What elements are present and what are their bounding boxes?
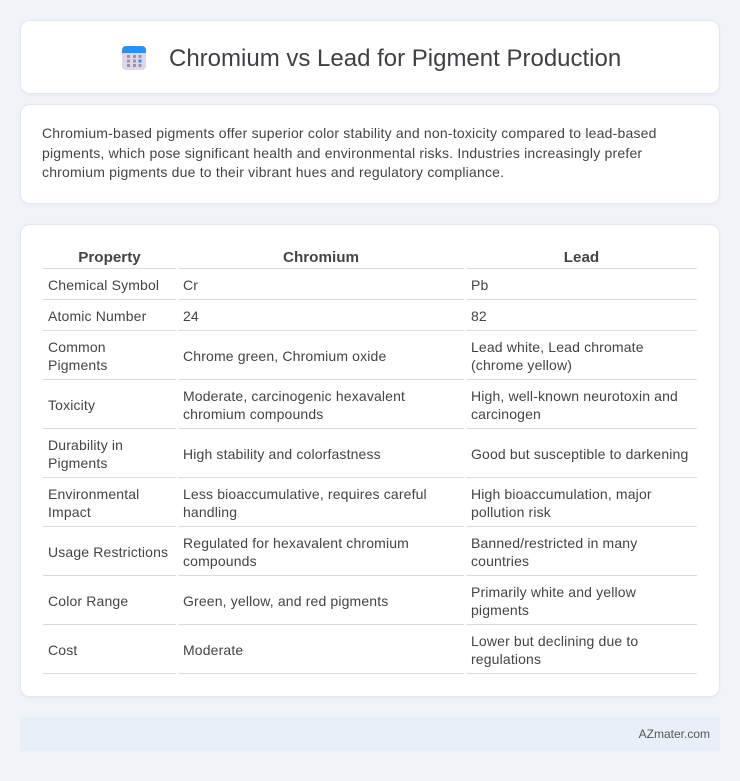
row: Environmental Impact: Environmental (48, 486, 139, 502)
row: Atomic Number: 82 (471, 308, 487, 324)
row: Environmental Impact: High bioaccumulation, major (471, 486, 652, 502)
row: Durability in Pigments: Good but susceptible to darkening (471, 446, 688, 462)
title: Chromium vs Lead for Pigment Production (169, 45, 621, 72)
row: Atomic Number: Atomic Number (48, 308, 146, 324)
row: Durability in Pigments: Durability in (48, 437, 123, 453)
row: Atomic Number (48, 308, 487, 324)
row: Cost: Lower but declining due to (471, 633, 638, 649)
row: Environmental Impact: Impact (48, 504, 91, 520)
row: Common Pigments: Common (48, 339, 106, 355)
row: Usage Restrictions: compounds (183, 553, 257, 569)
row: Common Pigments (48, 339, 644, 373)
row: Toxicity: chromium compounds (183, 406, 323, 422)
row: Common Pigments: Lead white, Lead chromate (471, 339, 644, 355)
row: Chemical Symbol (48, 277, 488, 293)
row: Toxicity: carcinogen (471, 406, 541, 422)
row: Environmental Impact: handling (183, 504, 237, 520)
intro panel (20, 104, 720, 204)
row: Color Range: Color Range (48, 593, 128, 609)
row: Toxicity: Moderate, carcinogenic hexavalent (183, 388, 405, 404)
row: Usage Restrictions: Banned/restricted in many (471, 535, 637, 551)
row: Cost (48, 633, 638, 667)
row: Environmental Impact: pollution risk (471, 504, 551, 520)
row: Chemical Symbol: Pb (471, 277, 488, 293)
row: Durability in Pigments (48, 437, 688, 471)
row: Toxicity: Toxicity (48, 397, 95, 413)
row: Environmental Impact: Less bioaccumulative, requires careful (183, 486, 427, 502)
intro text: chromium pigments due to their vibrant hues and regulatory compliance. (42, 164, 504, 180)
row: Color Range: Green, yellow, and red pigments (183, 593, 388, 609)
icon: calendar (122, 46, 146, 70)
row: Usage Restrictions: Usage Restrictions (48, 544, 168, 560)
intro text: Chromium-based pigments offer superior color stability and non-toxicity compared to lead-based (42, 125, 657, 141)
row: Toxicity (48, 388, 678, 422)
row: Usage Restrictions: countries (471, 553, 529, 569)
row: Durability in Pigments: Pigments (48, 455, 108, 471)
row: Common Pigments: Pigments (48, 357, 108, 373)
row: Color Range: Primarily white and yellow (471, 584, 636, 600)
footer credit: AZmater.com (639, 727, 710, 741)
table header: Lead: Lead (564, 249, 599, 266)
row: Usage Restrictions: Regulated for hexavalent chromium (183, 535, 409, 551)
header panel (20, 20, 720, 94)
row: Usage Restrictions (48, 535, 638, 569)
row: Durability in Pigments: High stability and colorfastness (183, 446, 381, 462)
row: Common Pigments: Chrome green, Chromium oxide (183, 348, 386, 364)
row: Cost: Moderate (183, 642, 243, 658)
table header: Property: Property (78, 249, 141, 266)
row: Color Range: pigments (471, 602, 529, 618)
row: Atomic Number: 24 (183, 308, 199, 324)
row: Cost: Cost (48, 642, 77, 658)
row: Chemical Symbol: Chemical Symbol (48, 277, 159, 293)
row: Environmental Impact (48, 486, 652, 520)
intro text (42, 125, 657, 180)
row: Cost: regulations (471, 651, 541, 667)
panel: comparison table (20, 224, 720, 697)
row: Chemical Symbol: Cr (183, 277, 198, 293)
row: Common Pigments: (chrome yellow) (471, 357, 572, 373)
table header: Chromium: Chromium (283, 249, 359, 266)
intro text: pigments, which pose significant health and environmental risks. Industries increasingly prefer (42, 144, 642, 160)
footer bar (20, 717, 720, 751)
row: Color Range (48, 584, 636, 618)
row: Toxicity: High, well-known neurotoxin and (471, 388, 678, 404)
